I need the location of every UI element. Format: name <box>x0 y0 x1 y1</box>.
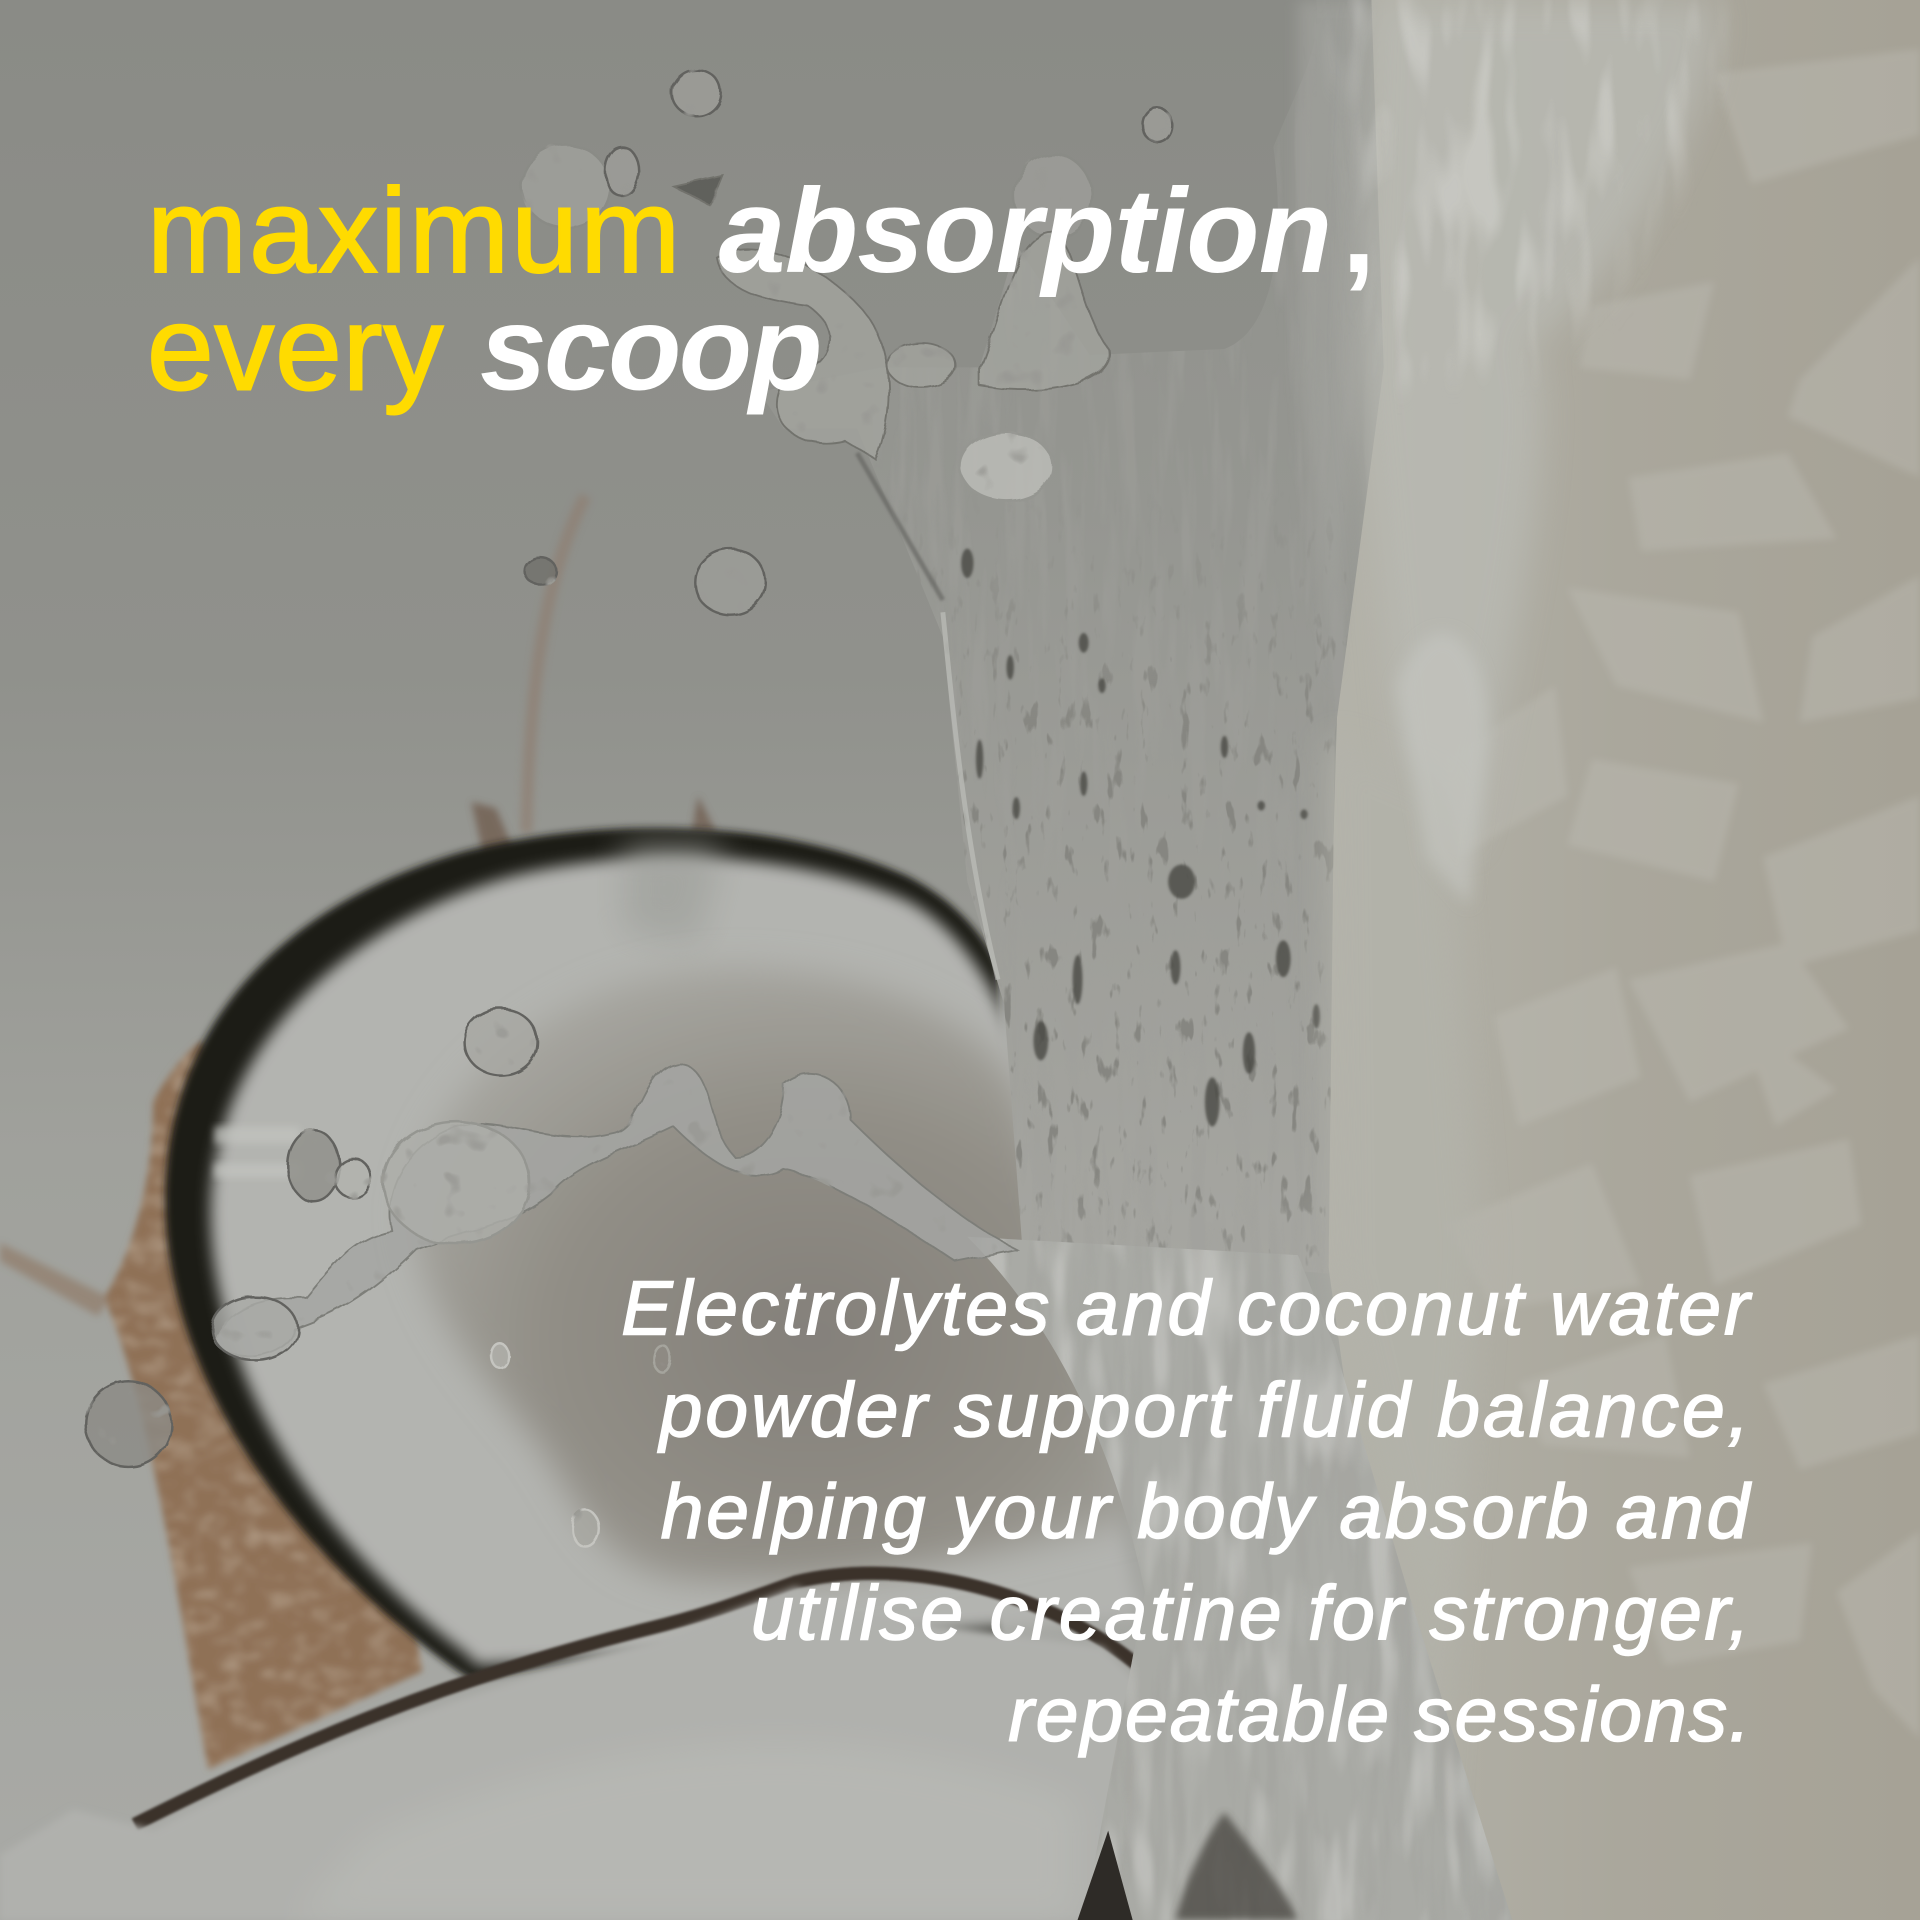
milky band right of the column <box>1359 0 1715 857</box>
photo: lower water stream <box>987 1238 1508 1920</box>
body text: helping your body absorb and <box>661 1469 1752 1555</box>
body text: powder support fluid balance, <box>657 1367 1752 1453</box>
photo: central water splash column <box>759 0 1788 1920</box>
title line 1: , <box>1342 164 1375 298</box>
dark specks in the water <box>961 549 1320 1127</box>
coconut white flesh <box>211 857 1139 1665</box>
title line 2: every <box>147 281 444 415</box>
title line 2: scoop <box>480 281 820 415</box>
title line 1: absorption <box>719 164 1331 298</box>
photo: coconut shell and husk <box>0 496 1139 1769</box>
body text: Electrolytes and coconut water <box>621 1266 1753 1352</box>
water crown behind the headline <box>673 175 1109 459</box>
coconut cavity <box>410 967 1139 1582</box>
title line 1: maximum <box>147 164 682 298</box>
droplets scattered in the air <box>86 70 1172 1547</box>
photo: coconut flakes panel <box>1322 0 1920 1920</box>
body text: utilise creatine for stronger, <box>751 1571 1752 1657</box>
body text <box>621 1266 1753 1758</box>
photo: coconut lower half <box>0 1573 1151 1920</box>
coconut dark rim <box>165 828 998 1680</box>
body text: repeatable sessions. <box>1008 1672 1752 1758</box>
photo: water arc with droplets <box>214 1063 1016 1356</box>
title <box>147 164 1375 415</box>
